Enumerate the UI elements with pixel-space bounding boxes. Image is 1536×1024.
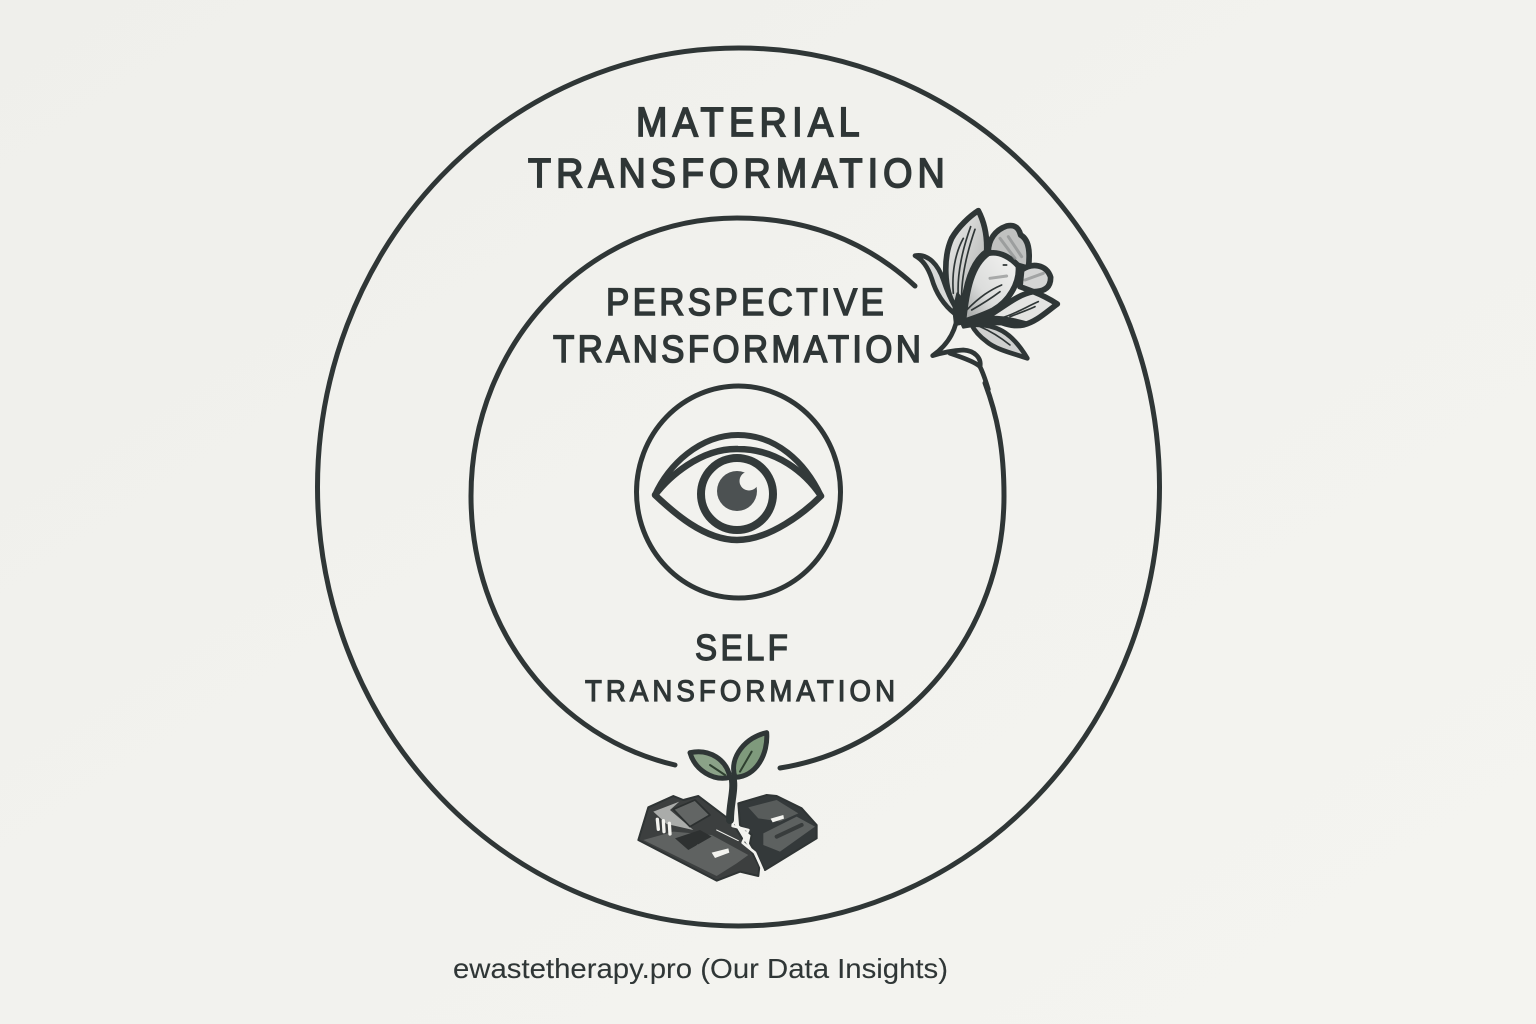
heading: perspective transformation bbox=[553, 281, 921, 370]
heading: self transformation: SELF bbox=[695, 629, 788, 668]
source caption: ewastetherapy.pro (Our Data Insights) bbox=[453, 953, 948, 984]
middle circle: perspective transformation bbox=[471, 218, 1004, 768]
inner circle: self transformation bbox=[636, 386, 840, 598]
heading: self transformation bbox=[585, 629, 895, 708]
heading: perspective transformation: PERSPECTIVE bbox=[606, 281, 884, 323]
heading: material transformation bbox=[528, 100, 945, 196]
left leaf bbox=[690, 752, 730, 778]
heading: material transformation: TRANSFORMATION bbox=[528, 151, 945, 196]
right device fragment bbox=[738, 795, 817, 870]
icon: eye bbox=[655, 435, 821, 540]
right leaf bbox=[734, 733, 767, 777]
left device fragment bbox=[638, 796, 759, 881]
icon: flower bbox=[915, 211, 1057, 389]
stem bbox=[730, 778, 733, 820]
crack bbox=[733, 817, 763, 870]
heading: self transformation: TRANSFORMATION bbox=[585, 675, 895, 708]
outer circle: material transformation bbox=[318, 48, 1160, 926]
heading: material transformation: MATERIAL bbox=[636, 100, 860, 145]
heading: perspective transformation: TRANSFORMATION bbox=[553, 328, 921, 370]
icon: seedling growing from broken e-waste device bbox=[638, 733, 817, 881]
